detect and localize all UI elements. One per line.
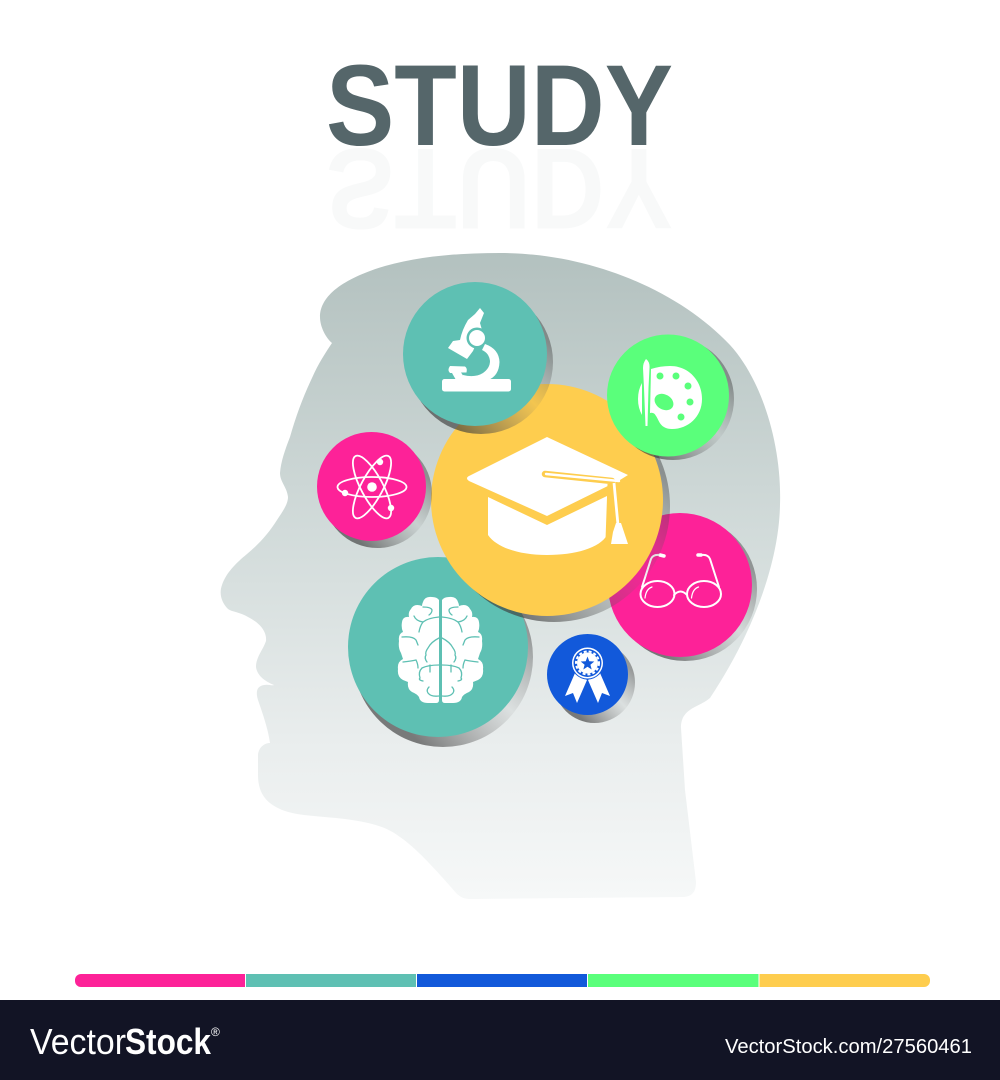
footer logo: ® (211, 1025, 220, 1039)
icon: brain (398, 597, 483, 703)
circle: atom (317, 432, 432, 548)
footer logo (30, 1021, 220, 1062)
icon: microscope (442, 308, 511, 392)
circle: microscope (403, 282, 553, 434)
tassel (611, 523, 628, 544)
cord (545, 474, 612, 481)
microscope arm (462, 344, 500, 380)
circle: graduation cap (431, 384, 670, 622)
cap board (467, 437, 628, 516)
title: STUDY (326, 42, 673, 170)
color legend bar (75, 974, 930, 987)
microscope head (469, 330, 485, 346)
icon: glasses (640, 555, 721, 607)
microscope tube (448, 308, 484, 359)
head silhouette (221, 253, 780, 899)
icon: atom (338, 451, 406, 523)
circle: brain (348, 557, 533, 747)
microscope stage (448, 366, 467, 380)
cap base (488, 496, 607, 555)
icon: palette (638, 359, 702, 429)
footer logo: Stock (125, 1021, 212, 1062)
brain right hemisphere (442, 597, 483, 703)
title reflection: STUDY (326, 124, 673, 252)
icon: award ribbon (565, 646, 610, 703)
icon: graduation cap (467, 437, 628, 555)
microscope head ring (466, 328, 488, 348)
circle: palette (607, 334, 734, 460)
circle: glasses (608, 513, 757, 661)
footer logo: Vector (30, 1021, 126, 1062)
brain left hemisphere (398, 597, 439, 703)
footer url: VectorStock.com/27560461 (725, 1036, 972, 1058)
microscope base (442, 379, 511, 392)
circle: award ribbon (547, 634, 635, 723)
footer band (0, 1000, 1000, 1080)
